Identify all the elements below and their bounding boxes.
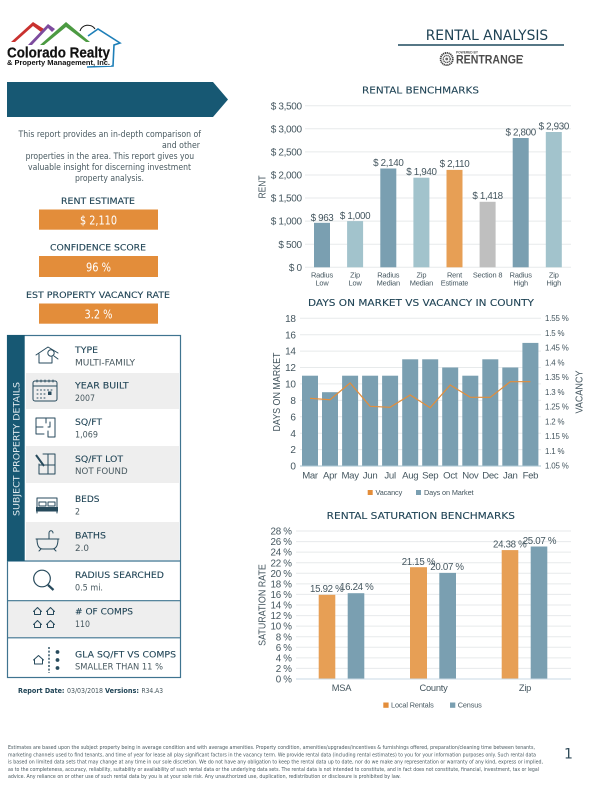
bar chart: rental saturation benchmarks: 6 % bbox=[276, 643, 292, 654]
rentrange logo: RENTRANGE bbox=[456, 54, 523, 66]
page number: 1 bbox=[564, 746, 573, 762]
footer disclaimer: advice. Any reliance on or other use of such rental data by you is at your sole risk. Any unauthorized use, duplication, redistribution or disclosure is prohibited by law. bbox=[8, 774, 401, 780]
combo chart: days on market vs vacancy: 2 bbox=[290, 445, 296, 456]
bar chart: rental saturation benchmarks: 22 % bbox=[271, 558, 292, 569]
combo chart: days on market vs vacancy: May bbox=[341, 470, 359, 481]
report date bbox=[18, 687, 163, 695]
bar chart: rental benchmarks: $ 2,000 bbox=[271, 171, 302, 182]
combo chart: days on market vs vacancy: VACANCY bbox=[574, 370, 586, 414]
combo chart: days on market vs vacancy: 1.4 % bbox=[545, 358, 565, 367]
bar chart: rental benchmarks: Low bbox=[349, 278, 362, 288]
row: radius searched: 0.5 mi. bbox=[75, 584, 103, 594]
combo chart: days on market vs vacancy: 1.15 % bbox=[545, 432, 569, 441]
row: sq/ft: SQ/FT bbox=[75, 418, 103, 428]
bar chart: rental benchmarks: $ 2,800 bbox=[506, 128, 537, 139]
row: type: TYPE bbox=[74, 346, 98, 356]
row: beds bbox=[36, 495, 100, 518]
bar chart: rental saturation benchmarks: 2 % bbox=[276, 664, 292, 675]
combo chart: days on market vs vacancy: 14 bbox=[285, 347, 296, 358]
combo chart: days on market vs vacancy: DAYS ON MARKET bbox=[271, 352, 283, 432]
bar chart: rental saturation benchmarks: 20 % bbox=[271, 569, 292, 580]
combo chart: days on market vs vacancy: Jun bbox=[363, 470, 377, 481]
combo chart: days on market vs vacancy: Dec bbox=[482, 470, 499, 481]
row: sq/ft lot: NOT FOUND bbox=[75, 467, 128, 477]
heading: rental saturation: RENTAL SATURATION BENCHMARKS bbox=[327, 511, 515, 522]
combo chart: days on market vs vacancy: 1.55 % bbox=[545, 314, 569, 323]
bar chart: rental benchmarks: Section 8 bbox=[473, 270, 502, 280]
legend: saturation chart bbox=[383, 700, 482, 710]
metric: vacancy rate: EST PROPERTY VACANCY RATE bbox=[26, 291, 170, 301]
bar chart: rental benchmarks: $ 1,000 bbox=[271, 217, 302, 228]
combo chart: days on market vs vacancy: Jan bbox=[503, 470, 518, 481]
bar chart: rental benchmarks: $ 3,000 bbox=[271, 124, 302, 135]
bar chart: rental benchmarks: High bbox=[513, 278, 528, 288]
bar chart: rental benchmarks: $ 0 bbox=[289, 263, 302, 274]
metric: confidence score: 96 % bbox=[86, 260, 111, 274]
combo chart: days on market vs vacancy: Sep bbox=[422, 470, 438, 481]
rentrange logo bbox=[441, 50, 523, 66]
combo chart: days on market vs vacancy: 1.05 % bbox=[545, 462, 569, 471]
report title: RENTAL ANALYSIS bbox=[426, 28, 548, 44]
bar chart: rental benchmarks: $ 2,140 bbox=[373, 158, 404, 169]
combo chart: days on market vs vacancy: Apr bbox=[323, 470, 338, 481]
report date: Versions: bbox=[105, 687, 139, 695]
bar chart: rental saturation benchmarks: 10 % bbox=[271, 622, 292, 633]
intro paragraph bbox=[18, 130, 202, 184]
metric: rent estimate bbox=[39, 197, 158, 230]
row: sq/ft lot bbox=[36, 454, 128, 477]
panel: subject property details bbox=[7, 335, 180, 678]
row: comps: 110 bbox=[75, 620, 90, 630]
row: comps: # OF COMPS bbox=[75, 608, 133, 618]
combo chart: days on market vs vacancy bbox=[271, 314, 586, 497]
bar chart: rental benchmarks: $ 1,418 bbox=[472, 191, 504, 202]
bar chart: rental benchmarks: Radius bbox=[311, 270, 334, 280]
bar chart: rental benchmarks: Rent bbox=[447, 270, 462, 280]
report date: Report Date: bbox=[18, 687, 64, 695]
panel: subject property details: SUBJECT PROPERTY DETAILS bbox=[13, 382, 23, 516]
metric: rent estimate: $ 2,110 bbox=[80, 214, 117, 228]
logo: Colorado Realty bbox=[6, 22, 120, 67]
bar chart: rental saturation benchmarks: 20.07 % bbox=[430, 562, 464, 573]
combo chart: days on market vs vacancy: Aug bbox=[402, 470, 418, 481]
heading: days on market: DAYS ON MARKET VS VACANCY IN COUNTY bbox=[308, 298, 534, 309]
combo chart: days on market vs vacancy: 1.5 % bbox=[545, 329, 565, 338]
bar chart: rental saturation benchmarks: 28 % bbox=[271, 527, 292, 538]
bar chart: rental benchmarks: $ 2,930 bbox=[539, 122, 570, 133]
row: type: MULTI-FAMILY bbox=[75, 358, 136, 368]
bar chart: rental benchmarks: High bbox=[546, 278, 561, 288]
bar chart: rental benchmarks: RENT bbox=[256, 175, 268, 198]
bar chart: rental benchmarks: $ 1,940 bbox=[406, 167, 437, 178]
row: beds: 2 bbox=[75, 508, 80, 518]
bar chart: rental benchmarks: Zip bbox=[416, 270, 426, 280]
bar chart: rental saturation benchmarks: 26 % bbox=[271, 537, 292, 548]
bar chart: rental saturation benchmarks: 24.38 % bbox=[493, 540, 527, 551]
row: year built bbox=[33, 380, 129, 404]
row: beds: BEDS bbox=[75, 495, 100, 505]
intro paragraph: and other bbox=[162, 141, 200, 151]
combo chart: days on market vs vacancy: 18 bbox=[285, 314, 296, 325]
combo chart: days on market vs vacancy: 1.35 % bbox=[545, 373, 569, 382]
logo: Colorado Realty: Colorado Realty bbox=[7, 44, 111, 62]
bar chart: rental saturation benchmarks: 18 % bbox=[271, 580, 292, 590]
bar chart: rental benchmarks: Low bbox=[315, 278, 329, 288]
footer disclaimer: Estimates are based upon the subject property being in average condition and with average amenities. Property condition, amenities/upgrades/incentives & furnishings offered, preparation/cleaning time between tenants, bbox=[8, 745, 535, 751]
row: gla vs comps: SMALLER THAN 11 % bbox=[75, 662, 163, 672]
bar chart: rental benchmarks: $ 1,000 bbox=[340, 211, 371, 222]
legend: days on market chart: Vacancy bbox=[376, 488, 403, 497]
row: year built: 2007 bbox=[75, 394, 95, 404]
combo chart: days on market vs vacancy: Nov bbox=[462, 470, 479, 481]
rentrange logo: POWERED BY bbox=[456, 50, 479, 54]
report date: 03/03/2018 bbox=[67, 687, 103, 695]
combo chart: days on market vs vacancy: 16 bbox=[285, 330, 296, 341]
metric: rent estimate: RENT ESTIMATE bbox=[61, 197, 135, 207]
row: baths bbox=[36, 531, 106, 554]
bar chart: rental saturation benchmarks: 0 % bbox=[276, 675, 292, 686]
bar chart: rental saturation benchmarks: Zip bbox=[519, 683, 531, 693]
bar chart: rental benchmarks: Zip bbox=[350, 270, 360, 280]
bar chart: rental saturation benchmarks: 16.24 % bbox=[340, 582, 374, 593]
combo chart: days on market vs vacancy: 1.25 % bbox=[545, 403, 569, 412]
intro paragraph: property analysis. bbox=[75, 174, 144, 184]
metric: vacancy rate bbox=[26, 291, 170, 324]
bar chart: rental benchmarks: $ 2,500 bbox=[271, 148, 302, 158]
combo chart: days on market vs vacancy: 4 bbox=[290, 429, 296, 440]
bar chart: rental benchmarks: $ 1,500 bbox=[271, 194, 302, 205]
bar chart: rental saturation benchmarks: SATURATION RATE bbox=[257, 564, 269, 646]
legend: days on market chart bbox=[368, 488, 474, 497]
bar chart: rental saturation benchmarks bbox=[257, 527, 571, 710]
row: comps bbox=[34, 608, 133, 630]
bar chart: rental saturation benchmarks: County bbox=[420, 683, 448, 693]
intro paragraph: This report provides an in-depth comparison of bbox=[18, 130, 202, 140]
bar chart: rental saturation benchmarks: 25.07 % bbox=[523, 536, 557, 547]
metric: vacancy rate: 3.2 % bbox=[84, 308, 112, 322]
bar chart: rental saturation benchmarks: 21.15 % bbox=[402, 557, 436, 568]
row: radius searched: RADIUS SEARCHED bbox=[75, 571, 164, 581]
bar chart: rental benchmarks: $ 500 bbox=[278, 240, 302, 251]
legend: saturation chart: Local Rentals bbox=[391, 700, 434, 710]
combo chart: days on market vs vacancy: 1.3 % bbox=[545, 388, 565, 397]
combo chart: days on market vs vacancy: 10 bbox=[285, 380, 296, 390]
banner arrow bbox=[7, 82, 228, 117]
combo chart: days on market vs vacancy: 12 bbox=[285, 363, 296, 374]
footer disclaimer bbox=[8, 745, 543, 780]
legend: days on market chart: Days on Market bbox=[424, 488, 474, 497]
bar chart: rental saturation benchmarks: MSA bbox=[332, 683, 352, 693]
bar chart: rental benchmarks bbox=[256, 101, 571, 288]
bar chart: rental saturation benchmarks: 8 % bbox=[276, 632, 292, 643]
combo chart: days on market vs vacancy: 1.2 % bbox=[545, 417, 565, 426]
combo chart: days on market vs vacancy: 1.45 % bbox=[545, 344, 569, 352]
row: gla vs comps bbox=[34, 647, 176, 673]
combo chart: days on market vs vacancy: Mar bbox=[302, 470, 319, 481]
bar chart: rental benchmarks: $ 963 bbox=[311, 213, 334, 224]
intro paragraph: properties in the area. This report gives you bbox=[26, 152, 194, 162]
row: baths: 2.0 bbox=[75, 544, 89, 554]
bar chart: rental saturation benchmarks: 24 % bbox=[271, 548, 292, 559]
row: type bbox=[36, 346, 136, 368]
row: year built: YEAR BUILT bbox=[74, 382, 129, 392]
metric: confidence score bbox=[39, 244, 158, 277]
combo chart: days on market vs vacancy: Feb bbox=[523, 470, 538, 481]
intro paragraph: valuable insight for discerning investment bbox=[28, 163, 192, 173]
bar chart: rental benchmarks: Radius bbox=[510, 270, 532, 280]
bar chart: rental benchmarks: $ 3,500 bbox=[271, 101, 302, 112]
bar chart: rental benchmarks: Estimate bbox=[441, 278, 468, 288]
row: sq/ft lot: SQ/FT LOT bbox=[75, 455, 124, 465]
legend: saturation chart: Census bbox=[458, 700, 482, 710]
bar chart: rental benchmarks: Radius bbox=[377, 270, 400, 280]
combo chart: days on market vs vacancy: 6 bbox=[290, 412, 296, 423]
combo chart: days on market vs vacancy: Jul bbox=[384, 470, 396, 481]
row: baths: BATHS bbox=[75, 532, 106, 542]
bar chart: rental saturation benchmarks: 4 % bbox=[276, 654, 292, 664]
heading: rental benchmarks: RENTAL BENCHMARKS bbox=[362, 86, 479, 96]
bar chart: rental benchmarks: Median bbox=[410, 278, 433, 288]
report date: R34.A3 bbox=[142, 687, 163, 695]
combo chart: days on market vs vacancy: 8 bbox=[290, 396, 296, 407]
combo chart: days on market vs vacancy: 1.1 % bbox=[545, 447, 565, 456]
bar chart: rental benchmarks: Median bbox=[377, 278, 400, 288]
logo: Colorado Realty: & Property Management, Inc. bbox=[7, 58, 110, 67]
bar chart: rental benchmarks: Zip bbox=[549, 270, 559, 280]
row: sq/ft: 1,069 bbox=[75, 430, 98, 440]
combo chart: days on market vs vacancy: Oct bbox=[443, 470, 458, 481]
bar chart: rental saturation benchmarks: 12 % bbox=[271, 611, 292, 622]
bar chart: rental saturation benchmarks: 15.92 % bbox=[310, 584, 344, 595]
metric: confidence score: CONFIDENCE SCORE bbox=[50, 244, 146, 254]
row: gla vs comps: GLA SQ/FT VS COMPS bbox=[75, 650, 176, 660]
combo chart: days on market vs vacancy: 0 bbox=[290, 462, 296, 473]
row: sq/ft bbox=[36, 418, 103, 440]
bar chart: rental saturation benchmarks: 14 % bbox=[271, 601, 292, 612]
bar chart: rental saturation benchmarks: 16 % bbox=[271, 590, 292, 601]
row: radius searched bbox=[34, 570, 164, 594]
bar chart: rental benchmarks: $ 2,110 bbox=[440, 159, 470, 170]
